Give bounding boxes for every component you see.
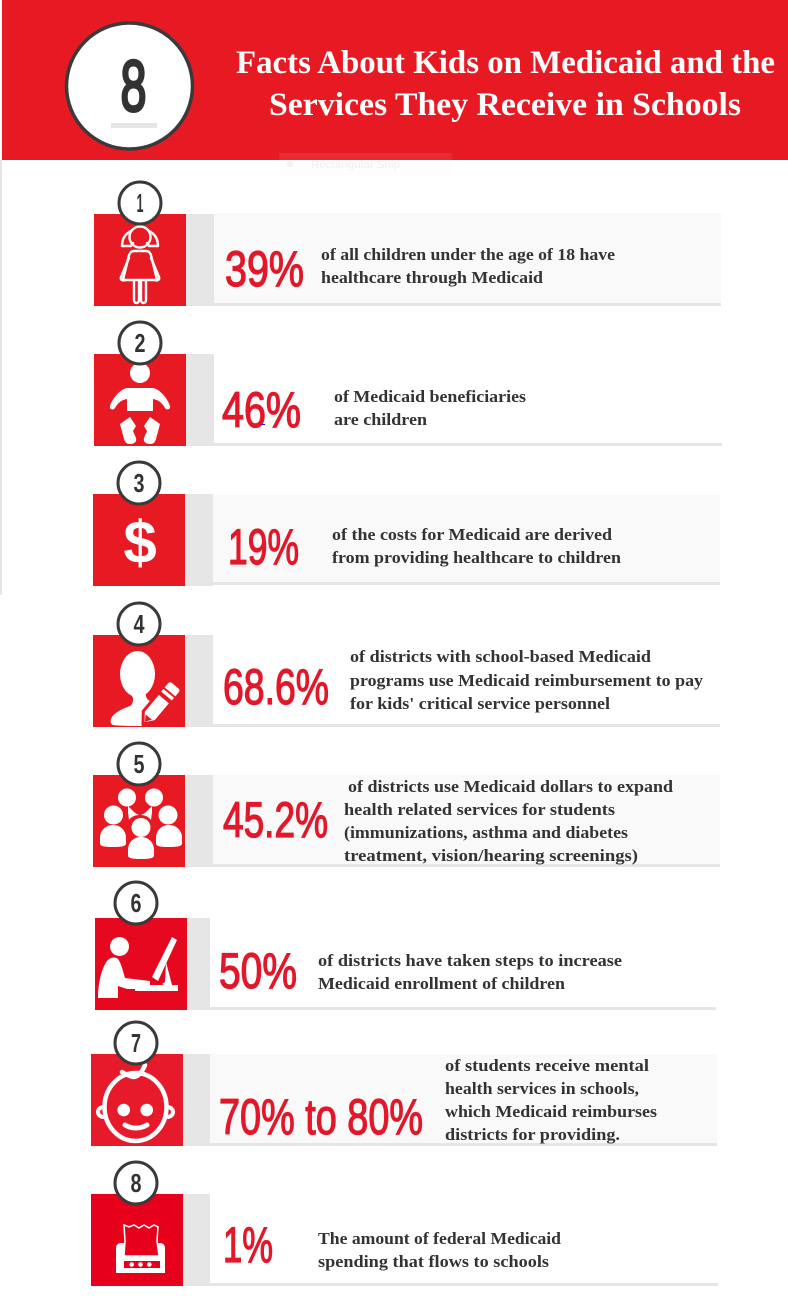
number badge 4: 4 xyxy=(134,609,145,639)
number badge 1: 1 xyxy=(136,188,144,218)
stat 19%: 19% xyxy=(228,519,299,575)
description 2: of Medicaid beneficiaries xyxy=(334,387,526,406)
description 1 xyxy=(321,245,615,287)
icon: baby xyxy=(110,363,170,444)
stat 39%: 39% xyxy=(225,241,304,297)
description 4: for kids' critical service personnel xyxy=(350,694,610,713)
description 4: of districts with school-based Medicaid xyxy=(350,647,652,666)
stat 46%: 46% xyxy=(222,382,301,438)
number badge 5 xyxy=(118,743,160,785)
icon: group of people xyxy=(100,788,182,859)
number badge 2: 2 xyxy=(134,328,146,358)
description 3: from providing healthcare to children xyxy=(332,548,622,567)
description 1: healthcare through Medicaid xyxy=(321,268,544,287)
description 8: The amount of federal Medicaid xyxy=(318,1229,562,1248)
description 7: districts for providing. xyxy=(445,1125,620,1144)
title: Services They Receive in Schools xyxy=(269,87,741,123)
number badge 7: 7 xyxy=(131,1028,141,1058)
stat 70% to 80%: 70% to 80% xyxy=(219,1089,423,1145)
description 8 xyxy=(318,1229,562,1271)
number badge 6 xyxy=(115,882,157,924)
badge: number 8 xyxy=(66,23,192,149)
description 8: spending that flows to schools xyxy=(318,1252,549,1271)
description 7: which Medicaid reimburses xyxy=(445,1102,657,1121)
description 5: health related services for students xyxy=(344,800,615,819)
description 7 xyxy=(445,1056,657,1144)
stat 45.2%: 45.2% xyxy=(223,792,328,848)
number badge 8: 8 xyxy=(130,1168,142,1198)
number badge 8 xyxy=(115,1162,157,1204)
panel: fact 7 xyxy=(91,1022,717,1146)
number badge 4 xyxy=(118,603,160,645)
description 3: of the costs for Medicaid are derived xyxy=(332,525,613,544)
panel: fact 8 xyxy=(91,1162,718,1286)
description 1: of all children under the age of 18 have xyxy=(321,245,615,264)
description 6 xyxy=(318,951,622,993)
number badge 3 xyxy=(118,462,160,504)
icon: smiling baby face xyxy=(98,1065,173,1141)
description 5: treatment, vision/hearing screenings) xyxy=(344,846,638,865)
description 5: (immunizations, asthma and diabetes xyxy=(344,823,628,842)
faint screenshot tool ghost label xyxy=(279,153,452,175)
description 4 xyxy=(350,647,704,713)
number badge 3: 3 xyxy=(134,468,144,498)
icon: person with pencil xyxy=(111,651,181,729)
header banner xyxy=(2,0,788,160)
description 4: programs use Medicaid reimbursement to pay xyxy=(350,671,704,690)
panel: fact 4 xyxy=(93,603,720,729)
panel: fact 3 xyxy=(93,462,720,586)
description 5 xyxy=(344,777,674,865)
number badge 6: 6 xyxy=(130,888,142,918)
panel: fact 2 xyxy=(94,322,722,446)
description 5: of districts use Medicaid dollars to expand xyxy=(348,777,674,796)
stat 1%: 1% xyxy=(223,1217,273,1273)
number badge 5: 5 xyxy=(134,749,144,779)
icon: dollar sign: $ xyxy=(123,509,157,576)
description 6: of districts have taken steps to increase xyxy=(318,951,622,970)
number badge 7 xyxy=(115,1022,157,1064)
badge: number 8: 8 xyxy=(120,47,146,127)
panel: fact 1 xyxy=(94,182,721,306)
number badge 2 xyxy=(119,322,161,364)
description 2: are children xyxy=(334,410,428,429)
number badge 1 xyxy=(119,182,161,224)
description 6: Medicaid enrollment of children xyxy=(318,974,566,993)
title: Facts About Kids on Medicaid and the xyxy=(236,45,775,81)
icon: person at computer xyxy=(98,937,178,998)
description 3 xyxy=(332,525,622,567)
description 7: of students receive mental xyxy=(445,1056,649,1075)
title xyxy=(236,45,775,123)
panel: fact 5 xyxy=(93,743,720,867)
stat 68.6%: 68.6% xyxy=(223,659,329,715)
icon: girl xyxy=(121,226,159,303)
description 2 xyxy=(334,387,526,429)
faint screenshot tool ghost label: Rectangular Snip xyxy=(311,159,400,171)
panel: fact 6 xyxy=(95,882,716,1010)
stat 50%: 50% xyxy=(219,943,297,999)
icon: printer xyxy=(116,1225,165,1273)
description 7: health services in schools, xyxy=(445,1079,639,1098)
